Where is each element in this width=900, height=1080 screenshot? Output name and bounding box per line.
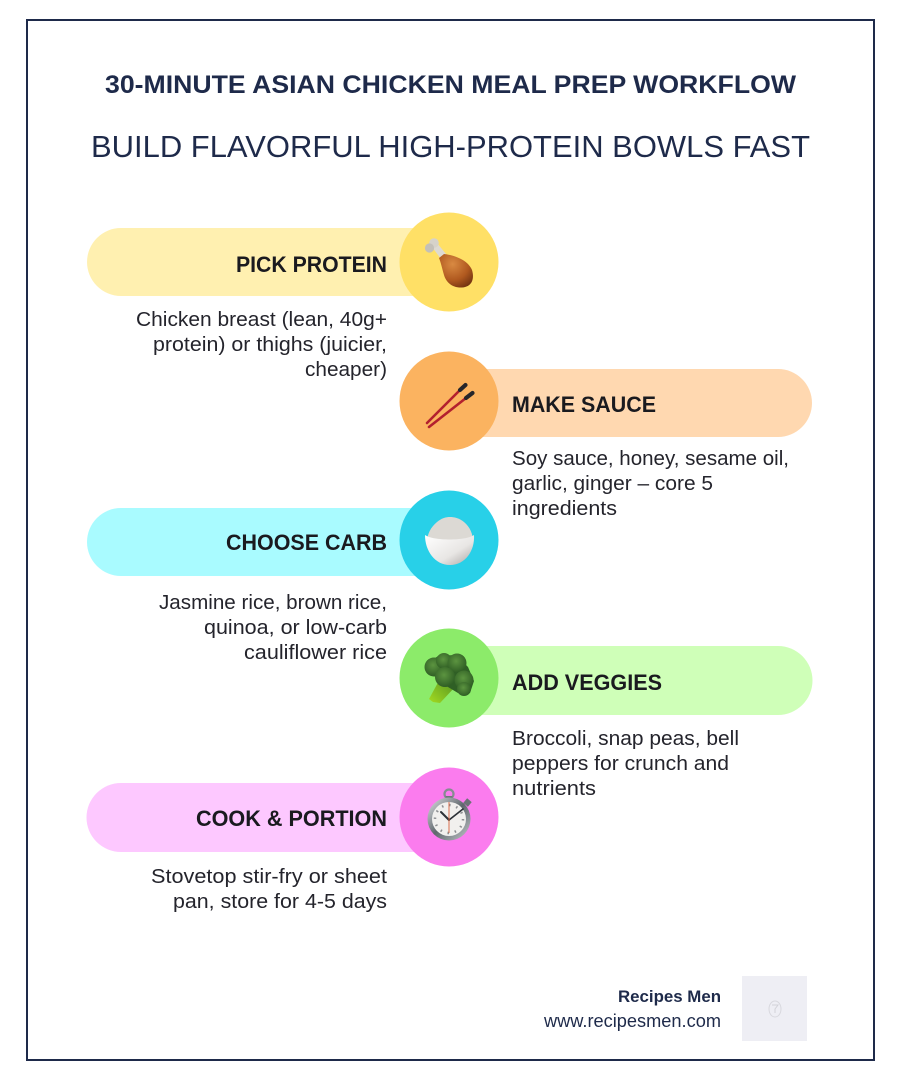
step 5 description: pan, store for 4-5 days [173, 891, 387, 913]
subtitle: BUILD FLAVORFUL HIGH-PROTEIN BOWLS FAST [91, 129, 810, 164]
step 2 pill [470, 369, 812, 437]
step 1 pill [87, 228, 430, 296]
step 5 description [151, 866, 387, 913]
step 2 circle [400, 352, 498, 450]
footer logo placeholder [742, 976, 807, 1041]
step 3 pill [87, 508, 430, 576]
step 5 pill [87, 783, 430, 852]
icon: chicken drumstick [425, 238, 473, 288]
title: 30-MINUTE ASIAN CHICKEN MEAL PREP WORKFLOW [105, 71, 796, 99]
step 2 description [512, 448, 789, 520]
step 4 pill [470, 646, 813, 715]
icon: broccoli [424, 653, 474, 703]
step 4 description: Broccoli, snap peas, bell [512, 728, 739, 750]
icon: stopwatch [428, 790, 472, 840]
step 1 description: cheaper) [305, 359, 387, 381]
step 1: pick protein [87, 212, 499, 381]
step 4 description: peppers for crunch and [512, 753, 729, 775]
icon: rice bowl [425, 517, 474, 565]
step 4 description: nutrients [512, 778, 596, 800]
step 5 description: Stovetop stir-fry or sheet [151, 866, 387, 888]
step 4: add veggies [400, 628, 813, 800]
step 4 heading: ADD VEGGIES [512, 670, 662, 695]
step 3 description: Jasmine rice, brown rice, [159, 592, 387, 614]
step 2 description: Soy sauce, honey, sesame oil, [512, 448, 789, 470]
step 5: cook and portion [87, 768, 499, 913]
step 3 heading: CHOOSE CARB [226, 530, 387, 555]
step 1 description: Chicken breast (lean, 40g+ [136, 309, 387, 331]
footer brand name: Recipes Men [618, 987, 721, 1006]
step 3 description: cauliflower rice [244, 642, 387, 664]
step 3: choose carb [87, 490, 498, 664]
step 3 description: quinoa, or low-carb [204, 617, 387, 639]
step 1 description [136, 309, 387, 381]
step 2 heading: MAKE SAUCE [512, 392, 656, 417]
step 1 description: protein) or thighs (juicier, [153, 334, 387, 356]
step 2 description: ingredients [512, 498, 617, 520]
step 1 circle [400, 212, 498, 312]
step 3 circle [400, 490, 498, 590]
step 1 heading: PICK PROTEIN [236, 252, 387, 277]
step 2 description: garlic, ginger – core 5 [512, 473, 713, 495]
step 5 heading: COOK & PORTION [196, 806, 387, 831]
icon: chopsticks [427, 385, 472, 427]
footer website: www.recipesmen.com [543, 1011, 721, 1031]
step 2: make sauce [400, 352, 812, 520]
step 5 circle [400, 768, 498, 866]
step 3 description [159, 592, 387, 664]
step 4 description [512, 728, 739, 800]
step 4 circle [400, 628, 498, 728]
